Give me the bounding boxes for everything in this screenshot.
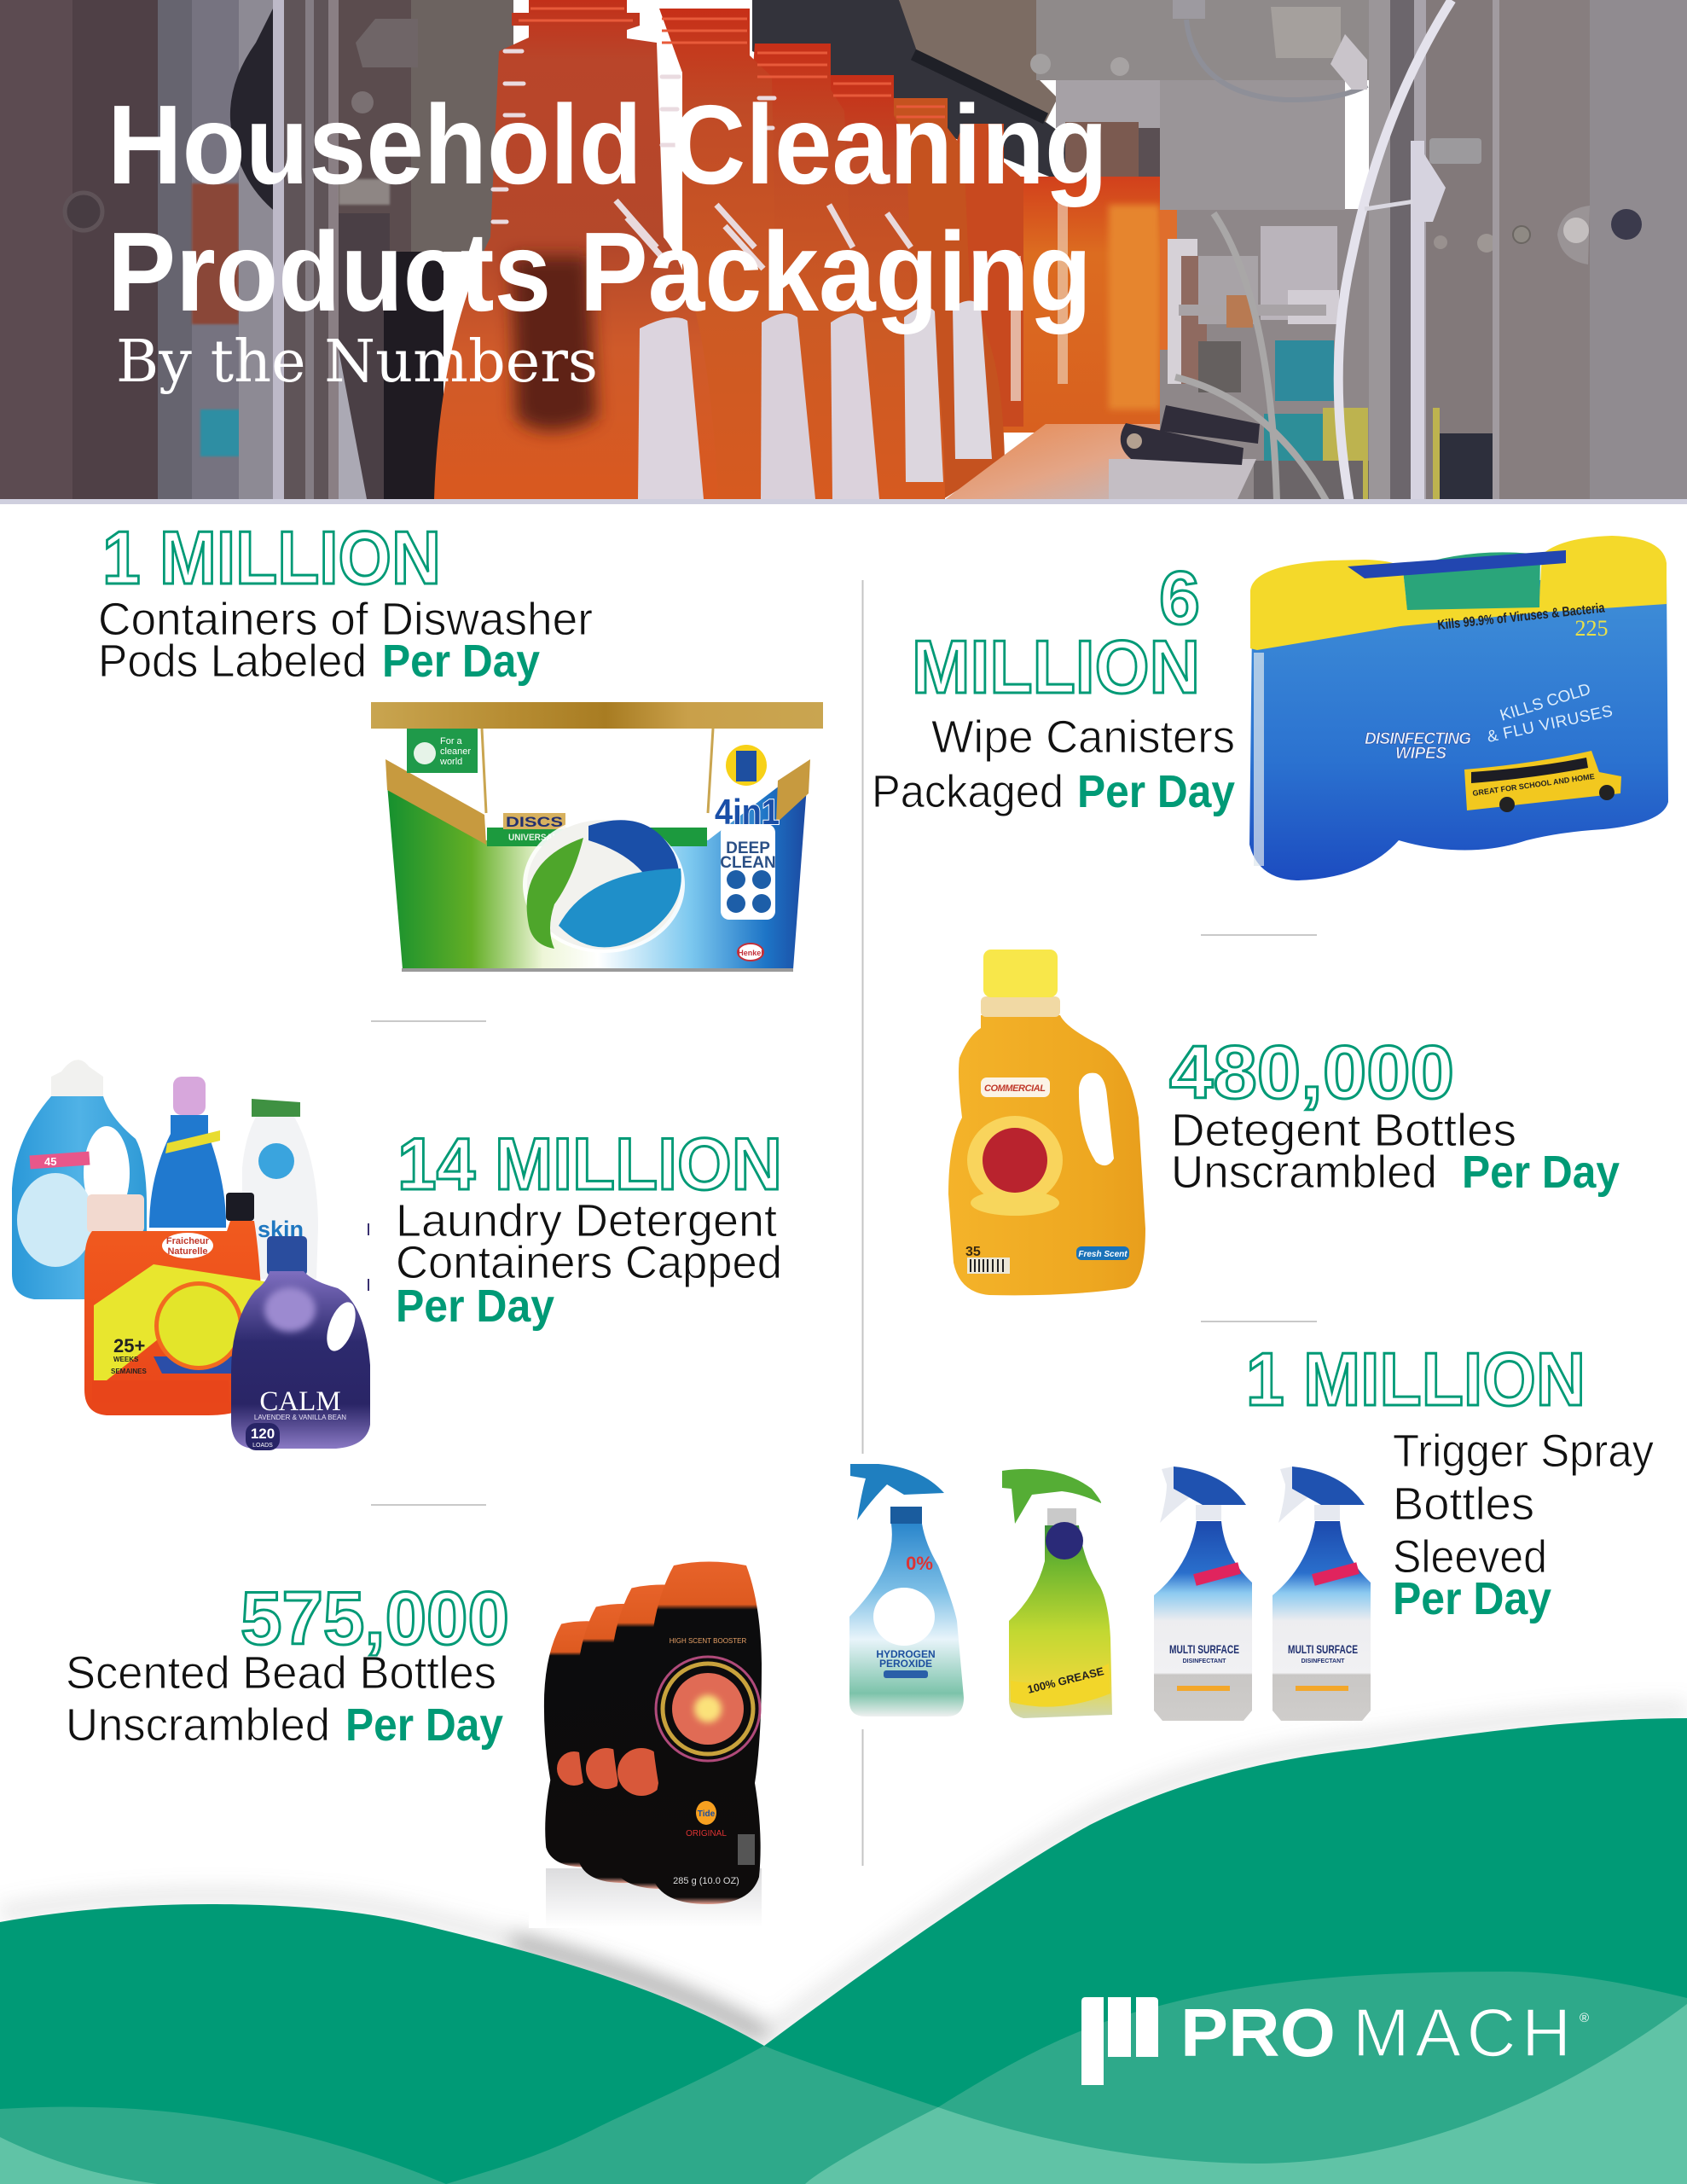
product: blue hydrogen peroxide spray: PEROXIDE bbox=[879, 1658, 932, 1670]
panel: stat detergent bottles unscrambled bbox=[948, 950, 1620, 1295]
stat description: Per Day bbox=[396, 1281, 554, 1332]
product: green lemon spray bbox=[1002, 1469, 1112, 1718]
product: disinfecting wipes pack: & FLU VIRUSES bbox=[1486, 702, 1615, 746]
stat number: 1 MILLION bbox=[102, 515, 441, 600]
product: dishwasher pod tub: DISCS bbox=[506, 814, 563, 830]
product: group of detergent jugs: CALM bbox=[259, 1386, 341, 1417]
product: multi surface spray second bottle: MULTI SURFACE bbox=[1288, 1642, 1358, 1656]
product: blue hydrogen peroxide spray: HYDROGEN bbox=[876, 1648, 936, 1660]
product: multi surface spray bbox=[1154, 1467, 1252, 1721]
stat description: Per Day bbox=[1462, 1147, 1620, 1198]
stat description: Laundry Detergent bbox=[396, 1195, 777, 1246]
product: multi surface spray: MULTI SURFACE bbox=[1169, 1642, 1239, 1656]
stat description: Detegent Bottles bbox=[1171, 1105, 1516, 1156]
product: dishwasher pod tub: UNIVERSAL bbox=[508, 833, 558, 843]
product: group of detergent jugs bbox=[12, 1060, 370, 1450]
product: group of detergent jugs: LOADS bbox=[252, 1443, 273, 1449]
stat number: 575,000 bbox=[241, 1576, 509, 1660]
panel: stat laundry detergent bbox=[12, 1060, 782, 1450]
logo: ProMach bbox=[1081, 1995, 1589, 2085]
stat description: Per Day bbox=[382, 636, 540, 687]
stat description bbox=[66, 1647, 503, 1751]
stat description: Trigger Spray bbox=[1393, 1426, 1654, 1477]
product: disinfecting wipes pack: Kills 99.9% of Viruses & Bacteria bbox=[1437, 601, 1605, 633]
icon: ProMach bars bbox=[1081, 1997, 1158, 2085]
bottle row bbox=[434, 0, 1369, 499]
product: multi surface spray second bottle bbox=[1272, 1467, 1371, 1721]
stat description: Bottles bbox=[1393, 1478, 1534, 1530]
stat description: Per Day bbox=[345, 1699, 503, 1751]
stat description: Containers Capped bbox=[396, 1237, 782, 1288]
stat description: Wipe Canisters bbox=[931, 712, 1235, 763]
product: dishwasher pod tub: For a bbox=[440, 736, 463, 746]
product: group of detergent jugs: Fraicheur bbox=[166, 1236, 210, 1246]
product: disinfecting wipes pack: 225 bbox=[1574, 616, 1609, 641]
panel: stat wipe canisters bbox=[872, 536, 1668, 880]
product: multi surface spray: DISINFECTANT bbox=[1183, 1658, 1226, 1664]
product: group of detergent jugs: Naturelle bbox=[167, 1246, 208, 1257]
product: disinfecting wipes pack: DISINFECTING bbox=[1365, 730, 1471, 748]
product: scent bead bottles bbox=[529, 1561, 762, 1928]
panel: footer waves bbox=[0, 1718, 1687, 2184]
rib highlights bbox=[493, 51, 774, 222]
panel: stat dishwasher pods bbox=[98, 515, 823, 972]
title: Household Cleaning bbox=[107, 82, 1108, 207]
stat number bbox=[912, 555, 1200, 709]
product: yellow detergent bottle bbox=[948, 950, 1145, 1295]
title bbox=[107, 82, 1108, 334]
product: yellow detergent bottle: Fresh Scent bbox=[1078, 1250, 1128, 1259]
stat description bbox=[1171, 1105, 1620, 1198]
product: disinfecting wipes pack: WIPES bbox=[1395, 745, 1446, 763]
stat description: Scented Bead Bottles bbox=[66, 1647, 496, 1699]
product: blue hydrogen peroxide spray bbox=[849, 1464, 964, 1716]
stat description: Per Day bbox=[1393, 1573, 1551, 1624]
product: disinfecting wipes pack bbox=[1249, 536, 1668, 880]
subtitle: By the Numbers bbox=[116, 328, 598, 396]
product: disinfecting wipes pack: GREAT FOR SCHOOL AND HOME bbox=[1472, 772, 1595, 798]
product: dishwasher pod tub bbox=[371, 702, 823, 972]
stat number: 14 MILLION bbox=[397, 1124, 782, 1205]
logo wordmark: ® bbox=[1580, 2011, 1589, 2025]
product: green lemon spray: 100% GREASE bbox=[1026, 1664, 1105, 1696]
product: scent bead bottles: ORIGINAL bbox=[686, 1829, 727, 1838]
product: group of detergent jugs: 120 bbox=[251, 1426, 275, 1442]
logo wordmark: PRO bbox=[1180, 1995, 1336, 2071]
panel: stat scented bead bottles bbox=[66, 1561, 762, 1928]
stat number: MILLION bbox=[912, 624, 1200, 709]
stat description bbox=[396, 1195, 782, 1332]
product: scent bead bottles: 285 g (10.0 OZ) bbox=[673, 1876, 739, 1886]
product: group of detergent jugs: LAVENDER & VANILLA BEAN bbox=[254, 1414, 346, 1421]
panel: header photo of orange bottles on a filling line bbox=[0, 0, 1687, 501]
panel: footer shadow bbox=[0, 1710, 1687, 2037]
stat number: 1 MILLION bbox=[1246, 1337, 1586, 1421]
stat description: Sleeved bbox=[1393, 1531, 1547, 1583]
product: blue hydrogen peroxide spray: 0% bbox=[906, 1553, 933, 1574]
stat description bbox=[872, 712, 1235, 817]
stat number: 480,000 bbox=[1169, 1030, 1454, 1114]
product: group of detergent jugs: WEEKS bbox=[113, 1356, 139, 1363]
product: scent bead bottles: Tide bbox=[698, 1809, 716, 1819]
stat description: Per Day bbox=[1077, 766, 1235, 817]
stat description: Unscrambled bbox=[66, 1699, 330, 1751]
stat description bbox=[1393, 1426, 1654, 1624]
stat description: Containers of Diswasher bbox=[98, 594, 593, 645]
stat description: Packaged bbox=[872, 766, 1064, 817]
panel: stat trigger spray bottles bbox=[849, 1337, 1654, 1721]
product: dishwasher pod tub: 4in1 bbox=[715, 792, 780, 832]
logo wordmark bbox=[1180, 1995, 1589, 2071]
stat description: Pods Labeled bbox=[98, 636, 367, 687]
post bbox=[1363, 408, 1368, 499]
product: dishwasher pod tub: world bbox=[439, 757, 462, 767]
product: yellow detergent bottle: COMMERCIAL bbox=[984, 1083, 1046, 1094]
product: group of detergent jugs: 25+ bbox=[113, 1335, 145, 1356]
center vertical divider bbox=[861, 580, 863, 1866]
product: dishwasher pod tub: Henkel bbox=[738, 949, 763, 957]
product: multi surface spray second bottle: DISINFECTANT bbox=[1301, 1658, 1345, 1664]
bottle neck threads bbox=[519, 9, 945, 117]
stat description: Unscrambled bbox=[1171, 1147, 1437, 1198]
product: dishwasher pod tub: DEEP bbox=[726, 839, 770, 857]
product: dishwasher pod tub: CLEAN bbox=[720, 854, 776, 872]
stat description bbox=[98, 594, 593, 687]
white label panels bbox=[638, 317, 704, 499]
product: group of detergent jugs: 45 bbox=[44, 1155, 56, 1168]
title: Products Packaging bbox=[107, 209, 1092, 334]
product: yellow detergent bottle: 35 bbox=[965, 1245, 981, 1259]
handles bbox=[1160, 405, 1260, 444]
product: group of detergent jugs: skin bbox=[258, 1217, 304, 1242]
product: scent bead bottles: HIGH SCENT BOOSTER bbox=[670, 1637, 746, 1645]
product: group of detergent jugs: SEMAINES bbox=[111, 1368, 147, 1375]
logo wordmark: MACH bbox=[1353, 1995, 1571, 2071]
product: disinfecting wipes pack: KILLS COLD bbox=[1498, 681, 1593, 725]
product: dishwasher pod tub: cleaner bbox=[440, 746, 471, 757]
machinery bbox=[1160, 80, 1168, 499]
header bottom band bbox=[0, 499, 1687, 504]
stat number: 6 bbox=[1159, 555, 1200, 640]
